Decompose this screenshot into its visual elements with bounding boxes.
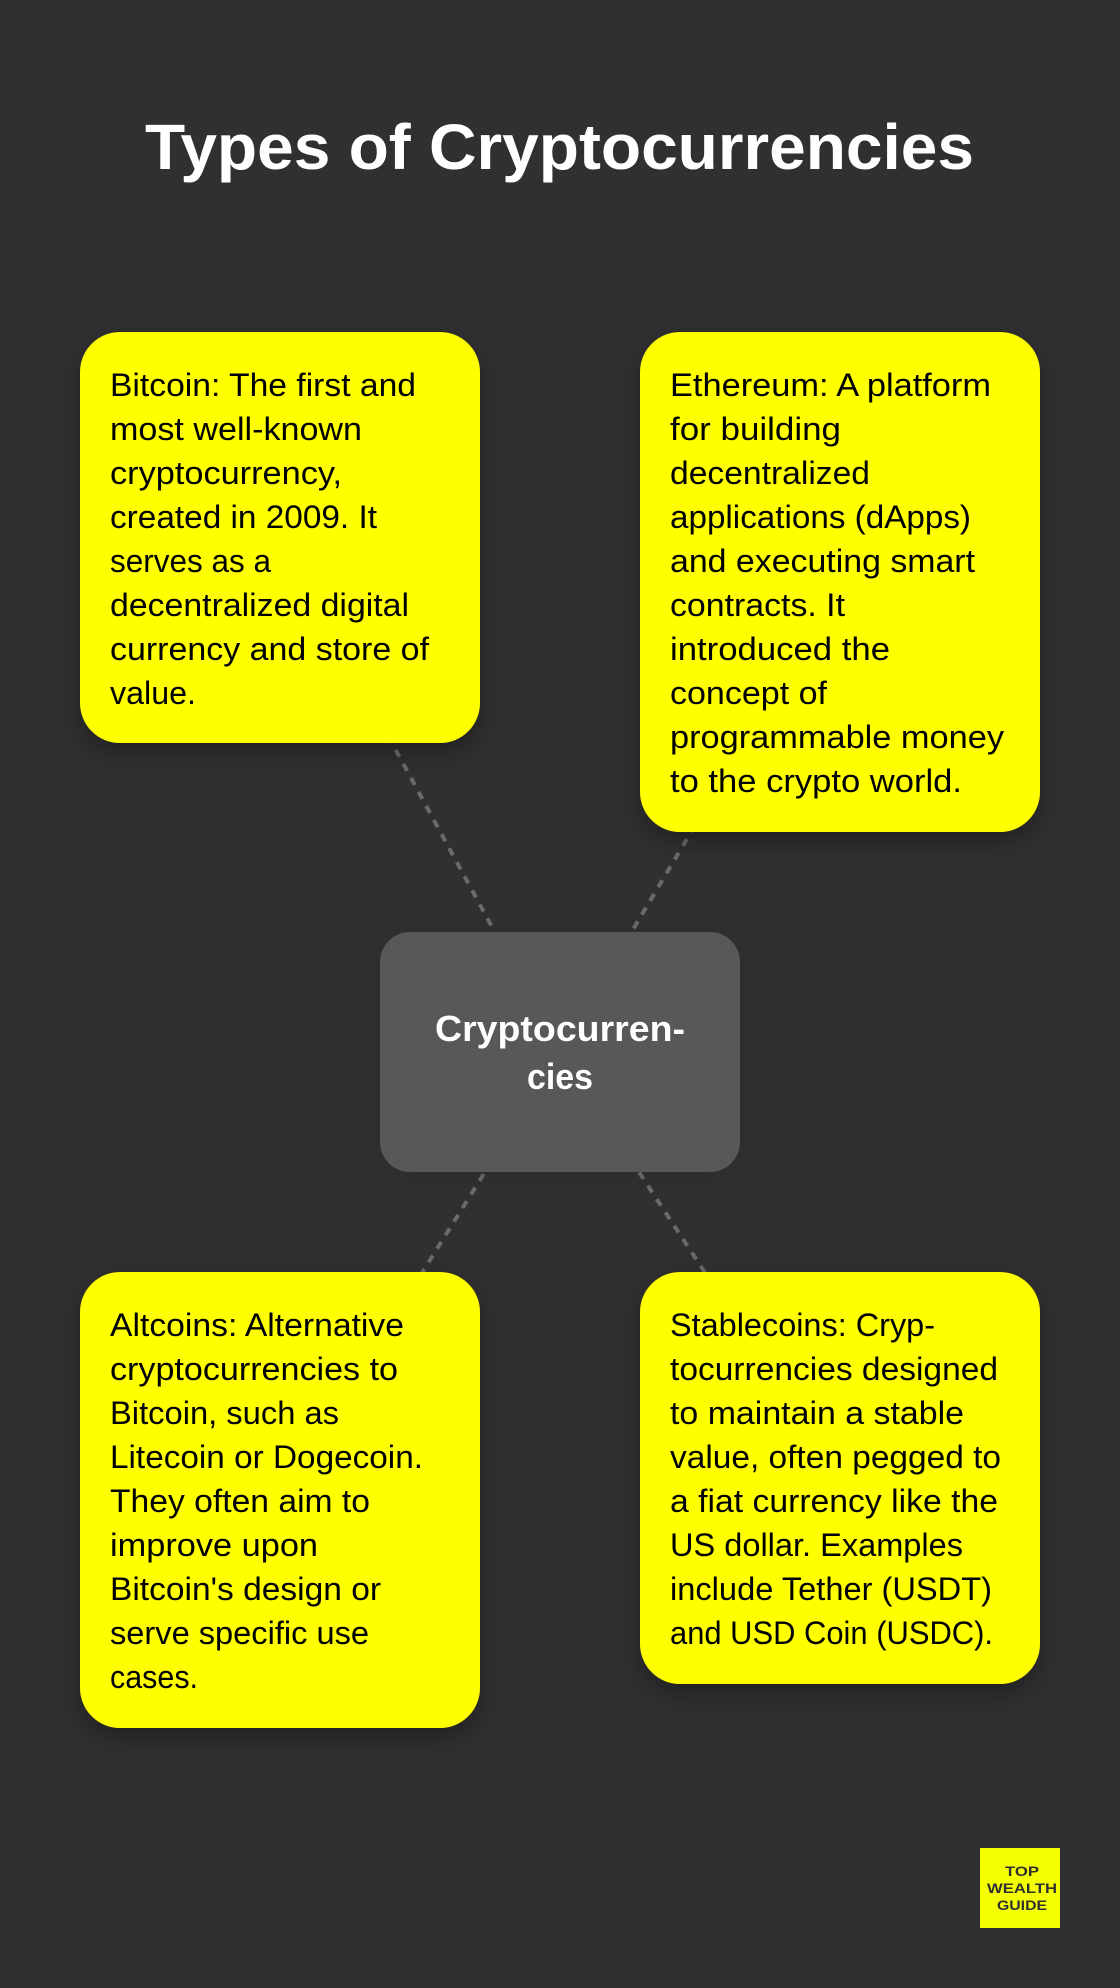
logo: Top Wealth Guide: WEALTH xyxy=(987,1880,1057,1896)
Altcoins text: They often aim to xyxy=(110,1483,370,1519)
Stablecoins text: include Tether (USDT) xyxy=(670,1571,992,1607)
Bitcoin text: created in 2009. It xyxy=(110,499,377,535)
Altcoins text: Bitcoin's design or xyxy=(110,1571,381,1607)
Bitcoin text: Bitcoin: The first and xyxy=(110,367,416,403)
Ethereum text: introduced the xyxy=(670,631,890,667)
Stablecoins text: to maintain a stable xyxy=(670,1395,964,1431)
Bitcoin text: serves as a xyxy=(110,543,271,579)
panel: Bitcoin xyxy=(80,332,480,743)
Ethereum text: programmable money xyxy=(670,719,1004,755)
Altcoins text: Litecoin or Dogecoin. xyxy=(110,1439,423,1475)
Altcoins text: serve specific use xyxy=(110,1615,369,1651)
logo: Top Wealth Guide xyxy=(980,1848,1060,1928)
Altcoins text: improve upon xyxy=(110,1527,318,1563)
Bitcoin text: decentralized digital xyxy=(110,587,409,623)
Ethereum text: applications (dApps) xyxy=(670,499,971,535)
Bitcoin text: currency and store of xyxy=(110,631,429,667)
title: Types of Cryptocurrencies xyxy=(145,111,974,183)
Stablecoins text: tocurrencies designed xyxy=(670,1351,998,1387)
center label: Cryptocurren- xyxy=(435,1008,685,1049)
Stablecoins text xyxy=(670,1307,1001,1651)
center label: cies xyxy=(527,1056,593,1097)
Stablecoins text: value, often pegged to xyxy=(670,1439,1001,1475)
connector lines xyxy=(280,537,840,1500)
Ethereum text xyxy=(670,367,1004,799)
panel: center node xyxy=(380,932,740,1172)
Stablecoins text: a fiat currency like the xyxy=(670,1483,998,1519)
Ethereum text: to the crypto world. xyxy=(670,763,962,799)
Altcoins text: cryptocurrencies to xyxy=(110,1351,398,1387)
Stablecoins text: and USD Coin (USDC). xyxy=(670,1615,993,1651)
Bitcoin text: cryptocurrency, xyxy=(110,455,342,491)
center label xyxy=(435,1008,685,1097)
Stablecoins text: US dollar. Examples xyxy=(670,1527,963,1563)
Altcoins text: Bitcoin, such as xyxy=(110,1395,339,1431)
panel: Ethereum xyxy=(640,332,1040,832)
Ethereum text: decentralized xyxy=(670,455,870,491)
Altcoins text: cases. xyxy=(110,1659,198,1695)
Ethereum text: for building xyxy=(670,411,841,447)
Altcoins text xyxy=(110,1307,423,1695)
panel: Stablecoins xyxy=(640,1272,1040,1684)
logo: Top Wealth Guide: GUIDE xyxy=(997,1897,1047,1913)
Ethereum text: contracts. It xyxy=(670,587,845,623)
Ethereum text: Ethereum: A platform xyxy=(670,367,991,403)
logo: Top Wealth Guide: TOP xyxy=(1005,1863,1039,1879)
Altcoins text: Altcoins: Alternative xyxy=(110,1307,404,1343)
Stablecoins text: Stablecoins: Cryp- xyxy=(670,1307,935,1343)
Bitcoin text: value. xyxy=(110,675,196,711)
panel: Altcoins xyxy=(80,1272,480,1728)
Bitcoin text: most well-known xyxy=(110,411,362,447)
Ethereum text: concept of xyxy=(670,675,827,711)
Ethereum text: and executing smart xyxy=(670,543,975,579)
Bitcoin text xyxy=(110,367,429,711)
